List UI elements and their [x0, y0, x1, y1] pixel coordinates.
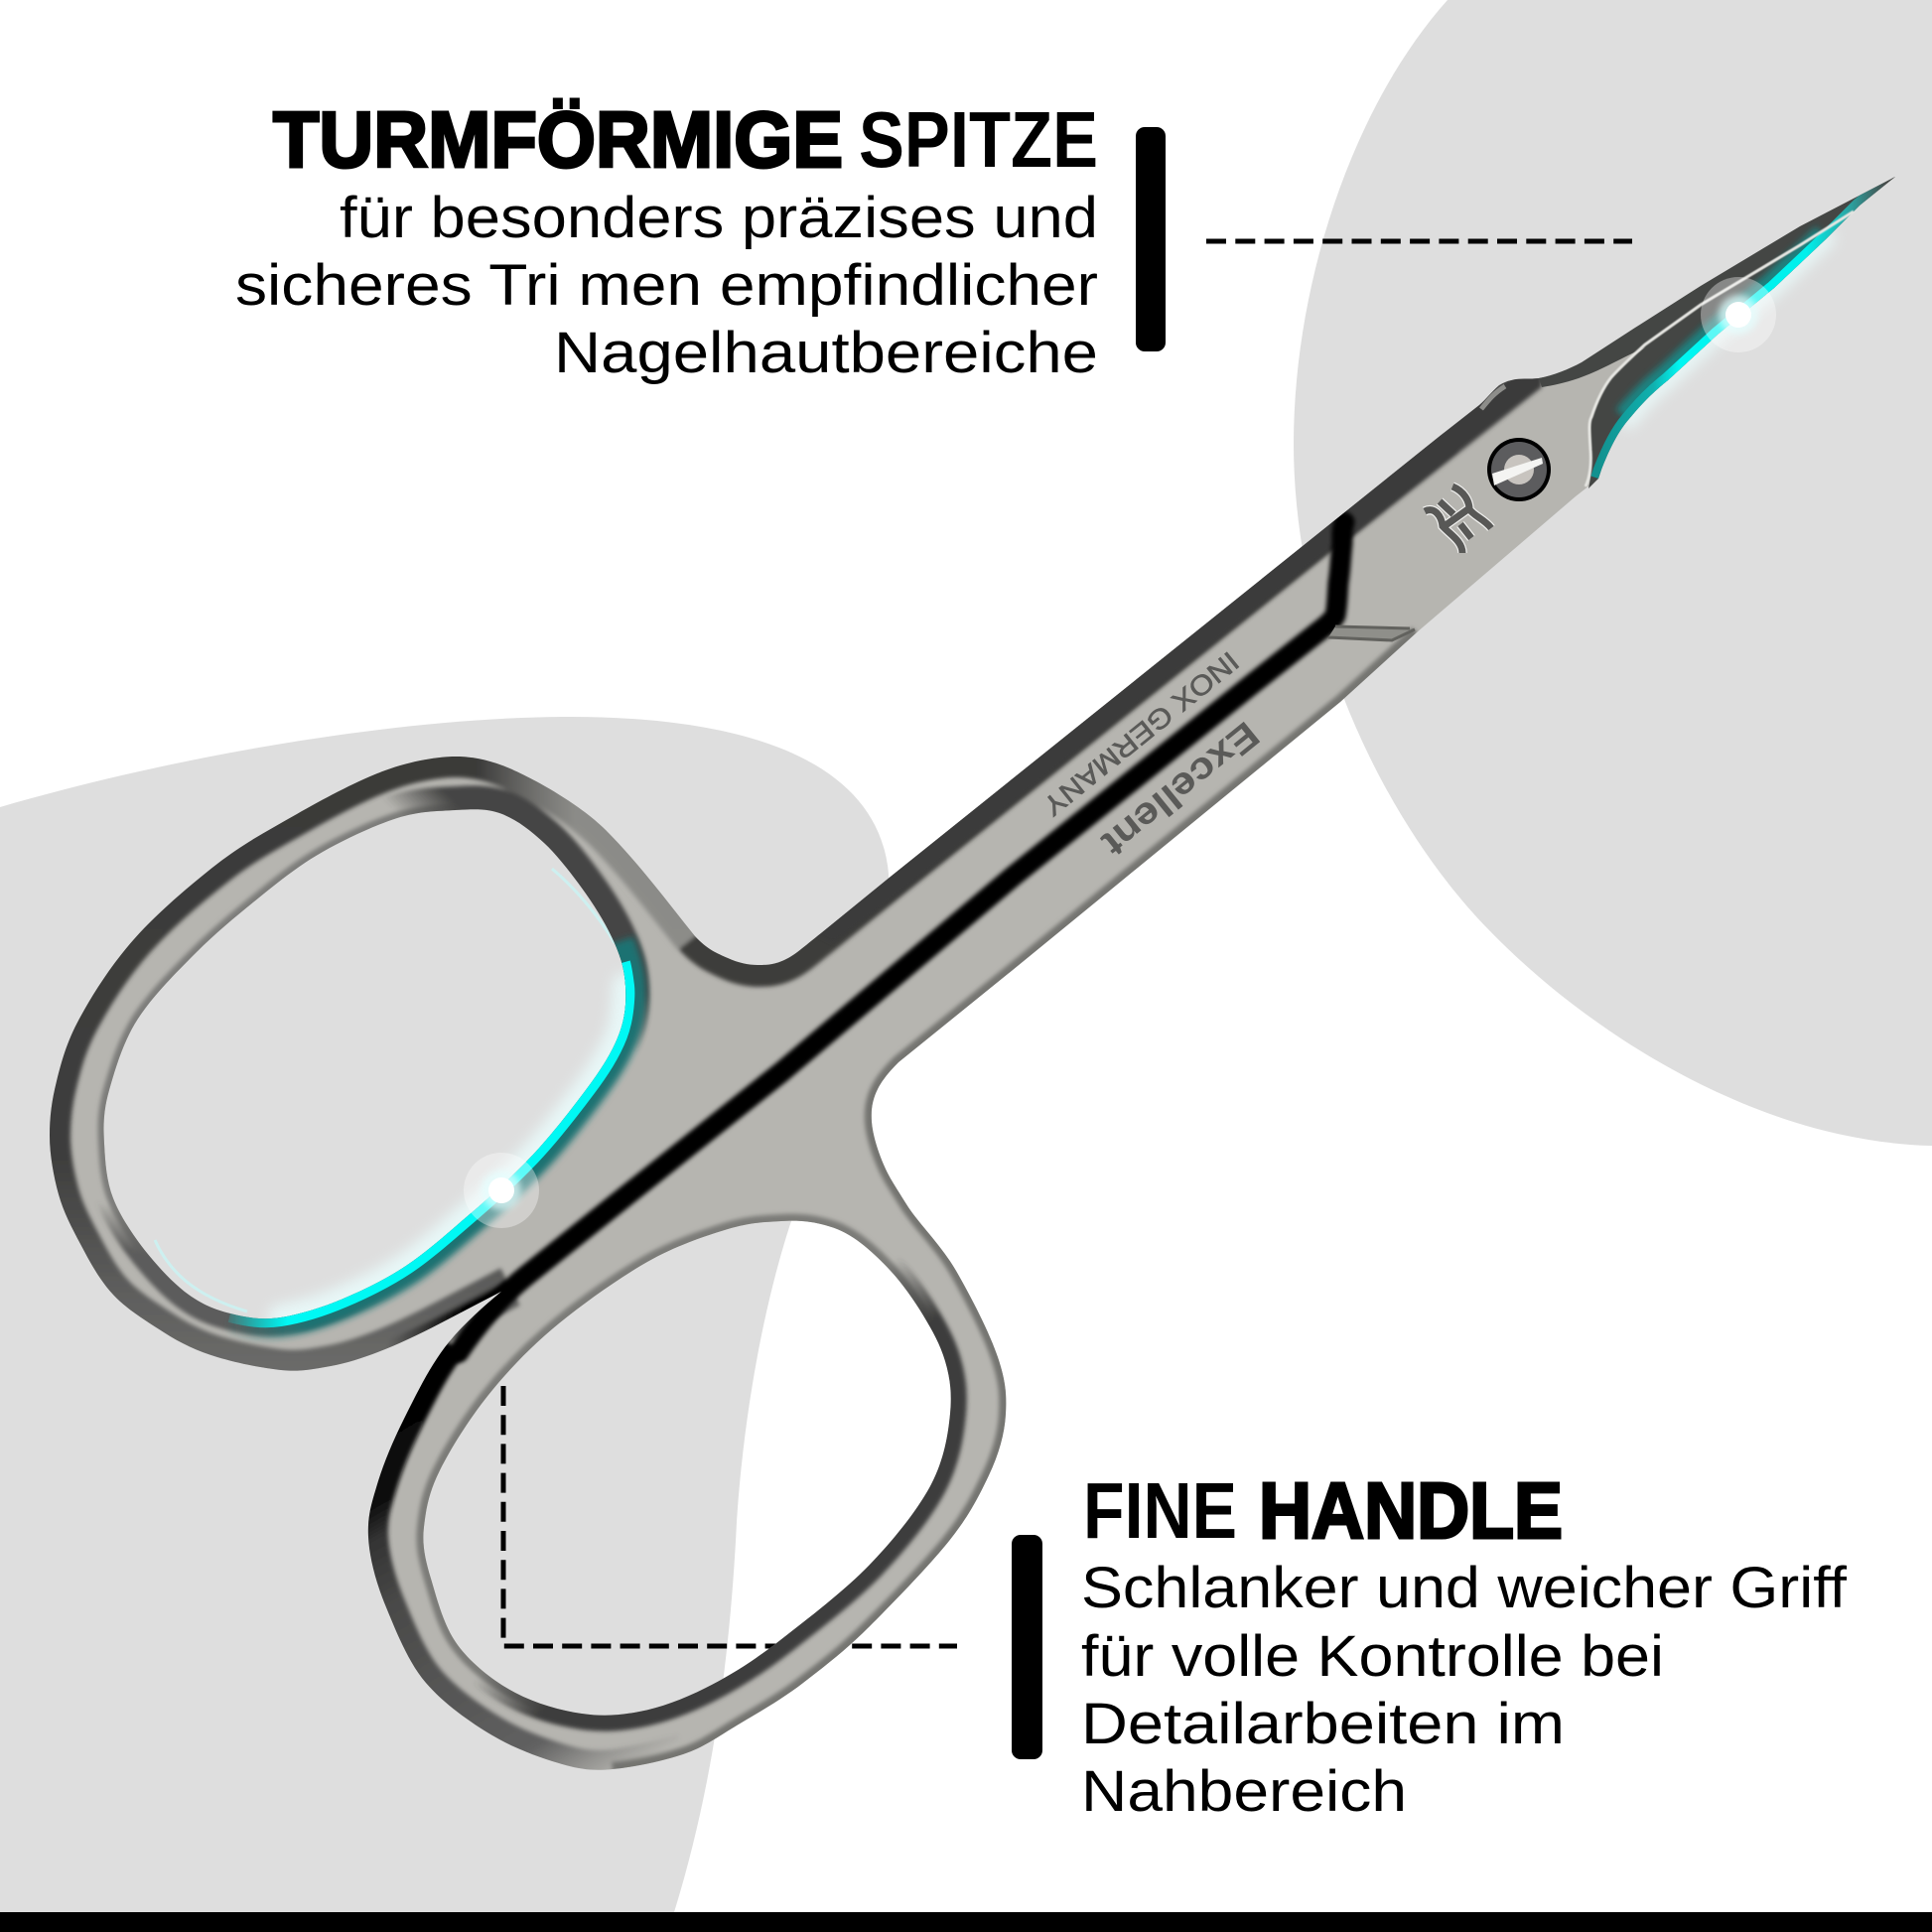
bottom black band: [0, 1912, 1932, 1932]
background blob: upper right: [1294, 0, 1932, 1146]
heading: handle: HANDLE: [1259, 1466, 1563, 1555]
ring B inner rim: [423, 1221, 951, 1716]
callout: tip: [235, 95, 1166, 385]
heading: tip: TURMFÖRMIGE: [273, 95, 843, 184]
body text: handle: Schlanker und weicher Griff: [1081, 1556, 1848, 1620]
teal shading on ring A: [230, 943, 625, 1318]
blade hump highlight: [1481, 386, 1505, 409]
heading: handle: [1083, 1466, 1563, 1555]
body text: handle: Detailarbeiten im: [1081, 1692, 1565, 1756]
heading: tip: SPITZE: [859, 95, 1098, 184]
blade teal and cyan edge: [1598, 177, 1895, 479]
ring A dark outer edge: [50, 757, 751, 1371]
blade: dark upper and cutting part: [1539, 177, 1895, 488]
body text: tip: für besonders präzises und: [340, 186, 1098, 250]
ring A dark inner band: [387, 782, 653, 1046]
cyan glow outside the metal: [281, 238, 1827, 1317]
background blob: lower left: [0, 717, 889, 1912]
ring A lower inner band: [100, 1206, 348, 1338]
cyan edge: handle ring: [230, 963, 625, 1318]
ring A lighter right side: [456, 757, 695, 936]
engraving: INOX GERMANY: INOX GERMANY: [1036, 645, 1245, 822]
blade highlight line: [1586, 211, 1854, 486]
ring B thin outer rim: [613, 632, 1417, 1769]
scissors metal body and shading: [50, 197, 1859, 1770]
engraving: Excellent: Excellent: [1093, 713, 1267, 864]
body text: tip: sicheres Tri men empfindlicher: [235, 253, 1098, 318]
body text: handle: für volle Kontrolle bei: [1081, 1624, 1664, 1689]
dashed leader: handle callout: [503, 1386, 957, 1646]
body text: tip: Nagelhautbereiche: [554, 321, 1098, 385]
central black groove: [459, 522, 1344, 1352]
body text: handle: [1081, 1556, 1848, 1824]
highlight spot: blade: [1701, 277, 1776, 352]
faint cyan tails in the handle opening: [155, 869, 615, 1311]
ring B outer edge: [368, 1342, 683, 1770]
upper shank dark band: [794, 372, 1542, 943]
callout bar: tip: [1136, 127, 1166, 351]
dashed leader: tip callout: [1206, 238, 1632, 244]
wedge under ring A: [385, 1287, 510, 1349]
ring A inner rim: [104, 809, 625, 1318]
scissors illustration: [50, 177, 1895, 1770]
ring B dark inner band: [479, 1262, 970, 1734]
callout bar: handle: [1012, 1535, 1042, 1759]
callout: handle: [1012, 1466, 1848, 1824]
brand logo mark: [1425, 486, 1491, 553]
highlight spot: handle: [464, 1153, 539, 1228]
body text: handle: Nahbereich: [1081, 1759, 1407, 1824]
pivot screw: [1487, 438, 1551, 501]
ring A crotch and shank shadow: [695, 434, 1443, 965]
heading: handle: FINE: [1083, 1466, 1237, 1555]
fold lines near the pivot: [1328, 626, 1415, 640]
body text: tip: [235, 186, 1098, 385]
